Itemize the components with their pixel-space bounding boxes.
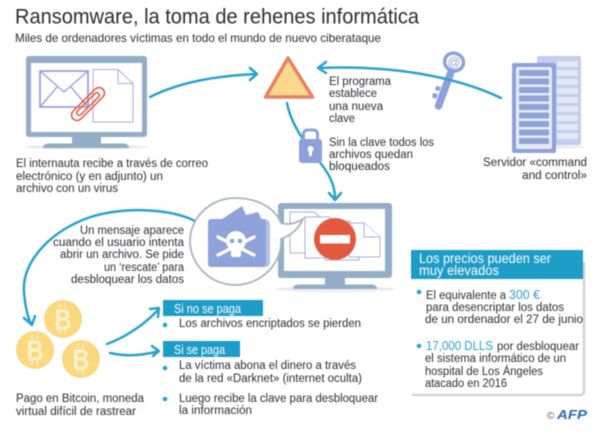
text: new key: El programa	[329, 76, 392, 88]
text: files locked	[329, 137, 434, 173]
panel: if paid: la información	[179, 405, 252, 417]
price: 300 euros: 300 €	[509, 288, 540, 302]
panel: if paid	[163, 341, 378, 417]
text: bitcoin payment: virtual difícil de rastrear	[16, 406, 136, 418]
icon: skull and crossbones	[218, 231, 254, 257]
price: 300 euros: de un ordenador el 27 de junio	[425, 314, 583, 326]
icon: bitcoin coins: B	[26, 336, 44, 368]
icon: skull speech bubble	[190, 198, 303, 285]
panel: if paid: Luego recibe la clave para desbloquear	[179, 393, 378, 405]
text: ransom message: Un mensaje aparece	[80, 225, 184, 237]
price: 17,000 dollars: el sistema informático de un	[425, 353, 566, 365]
text: new key	[329, 76, 392, 125]
arrow: to paying	[110, 346, 159, 356]
price: 17,000 dollars: 17,000 DLLS	[426, 339, 493, 353]
panel: if not paid: Los archivos encriptados se pierden	[179, 318, 361, 330]
text: email step	[16, 158, 208, 195]
text: email step: archivo con un virus	[16, 183, 118, 195]
price: 17,000 dollars	[417, 339, 579, 390]
panel: prices	[411, 250, 584, 395]
credit: AFP logo: AFP	[556, 407, 587, 422]
text: files locked: archivos quedan	[329, 149, 413, 161]
credit: AFP logo: ©	[547, 411, 555, 422]
icon: padlock	[299, 130, 322, 163]
credit: AFP logo	[547, 407, 587, 422]
icon: monitor with locked files	[275, 203, 395, 292]
text: files locked: Sin la clave todos los	[329, 137, 434, 149]
text: ransom message	[53, 225, 185, 286]
panel header	[411, 250, 583, 279]
arrow: server to warning	[318, 62, 501, 98]
price: 300 euros	[417, 288, 583, 326]
text: email step: El internauta recibe a través de correo	[16, 158, 208, 170]
text: email step: electrónico (y en adjunto) un	[16, 171, 163, 183]
icon: bitcoin coins: B	[72, 344, 90, 376]
price: 17,000 dollars: atacado en 2016	[425, 378, 507, 390]
icon: key: @	[448, 54, 461, 70]
text: server label: and control»	[522, 170, 587, 182]
arrow: bubble to bitcoin	[24, 210, 195, 325]
text: ransom message: un ‘rescate’ para	[104, 262, 185, 274]
price: 17,000 dollars: por desbloquear	[497, 341, 579, 353]
text: files locked: bloqueados	[329, 161, 390, 173]
icon: document	[93, 70, 133, 122]
icon: no entry sign	[314, 218, 356, 260]
text: bitcoin payment: Pago en Bitcoin, moneda	[16, 393, 145, 405]
icon: paper clip	[69, 85, 107, 123]
price: 300 euros: El equivalente a	[426, 290, 507, 302]
arrow: to not paying	[107, 308, 159, 344]
panel header: Los precios pueden ser	[419, 251, 551, 266]
icon: envelope	[40, 71, 88, 107]
icon: key	[432, 50, 466, 106]
panel: if paid: La víctima abona el dinero a través	[179, 360, 356, 372]
text: new key: una nueva	[329, 101, 384, 113]
text: ransom message: cuando el usuario intenta	[53, 237, 185, 249]
title: Ransomware, la toma de rehenes informática	[15, 6, 419, 28]
icon: file stack	[290, 212, 380, 260]
panel: if paid: de la red «Darknet» (internet oculta)	[179, 373, 362, 385]
subtitle: Miles de ordenadores víctimas en todo el mundo de nuevo ciberataque	[15, 31, 381, 45]
text: ransom message: abrir un archivo. Se pide	[60, 249, 184, 261]
text: server label: Servidor «command	[483, 157, 587, 169]
panel: if not paid: Si no se paga	[174, 302, 241, 316]
panel: if not paid	[163, 300, 361, 330]
price: 17,000 dollars: hospital de Los Ángeles	[425, 365, 543, 378]
icon: monitor with infected email	[24, 56, 148, 150]
icon: bitcoin coins	[16, 300, 100, 378]
text: new key: clave	[329, 113, 355, 125]
price: 300 euros: para desencriptar los datos	[426, 302, 564, 314]
arrow: warning through lock to monitor	[287, 103, 341, 200]
icon: warning triangle	[266, 58, 312, 97]
arrow: monitor to warning	[150, 68, 257, 97]
panel: if paid: Si se paga	[174, 343, 225, 357]
text: bitcoin payment	[16, 393, 145, 418]
panel header: muy elevados	[419, 263, 499, 278]
icon: bitcoin coins: B	[54, 304, 72, 336]
icon: server racks	[510, 56, 586, 153]
text: ransom message: desbloquear los datos	[71, 274, 184, 286]
text: server label	[483, 157, 587, 182]
text: new key: establece	[329, 88, 377, 100]
